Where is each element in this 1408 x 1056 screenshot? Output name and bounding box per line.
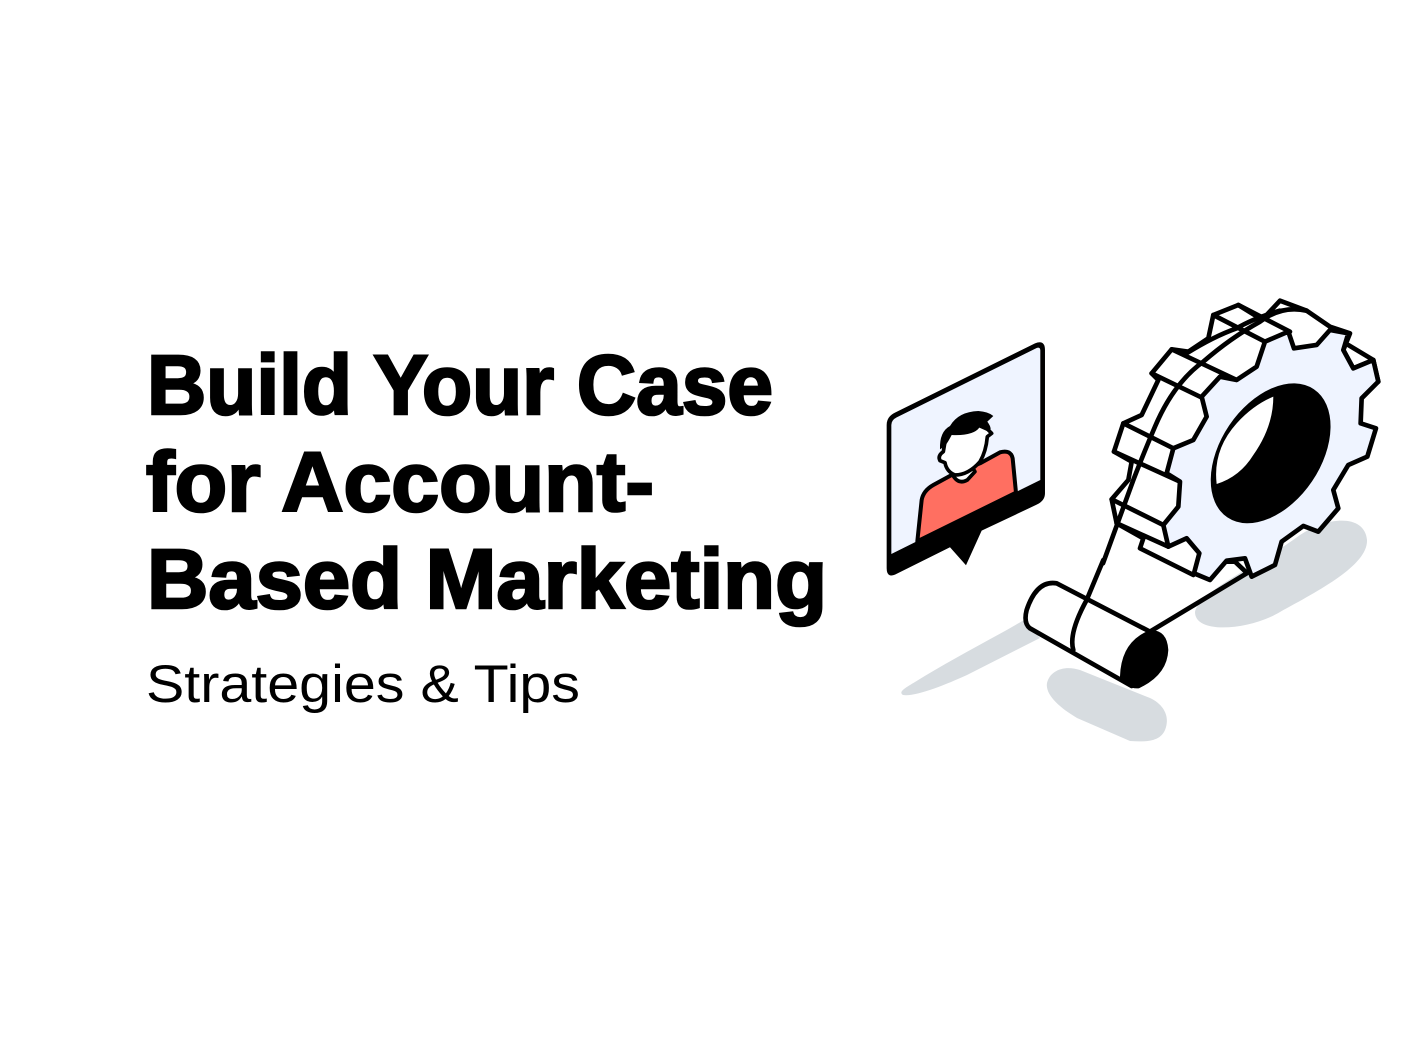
person hair — [940, 411, 993, 449]
title: for Account- — [146, 435, 654, 529]
belt left run — [1103, 309, 1307, 563]
belt right run — [1150, 573, 1247, 632]
subtitle: Strategies & Tips — [146, 655, 580, 714]
person neck — [953, 463, 975, 482]
gear tooth edges — [1112, 305, 1373, 573]
gear rim arc — [1187, 311, 1280, 353]
bubble frame — [887, 342, 1045, 575]
person shirt — [917, 452, 1016, 541]
roller body — [1026, 583, 1153, 686]
belt and roller — [1026, 560, 1247, 686]
belt lower curve — [1072, 560, 1103, 650]
roller end cap — [1122, 633, 1166, 686]
gear hole opening — [1216, 397, 1273, 484]
gear front face — [1163, 330, 1378, 580]
title: Based Marketing — [147, 532, 827, 626]
illustration: ground shadows — [901, 521, 1367, 741]
person head — [939, 425, 992, 475]
title: Build Your Case — [147, 338, 773, 432]
gear hole — [1186, 361, 1355, 545]
icon: profile speech bubble — [887, 342, 1045, 575]
gear back body — [1112, 301, 1378, 575]
bubble screen — [891, 348, 1040, 554]
icon: gear — [1103, 301, 1378, 580]
title — [146, 338, 827, 626]
